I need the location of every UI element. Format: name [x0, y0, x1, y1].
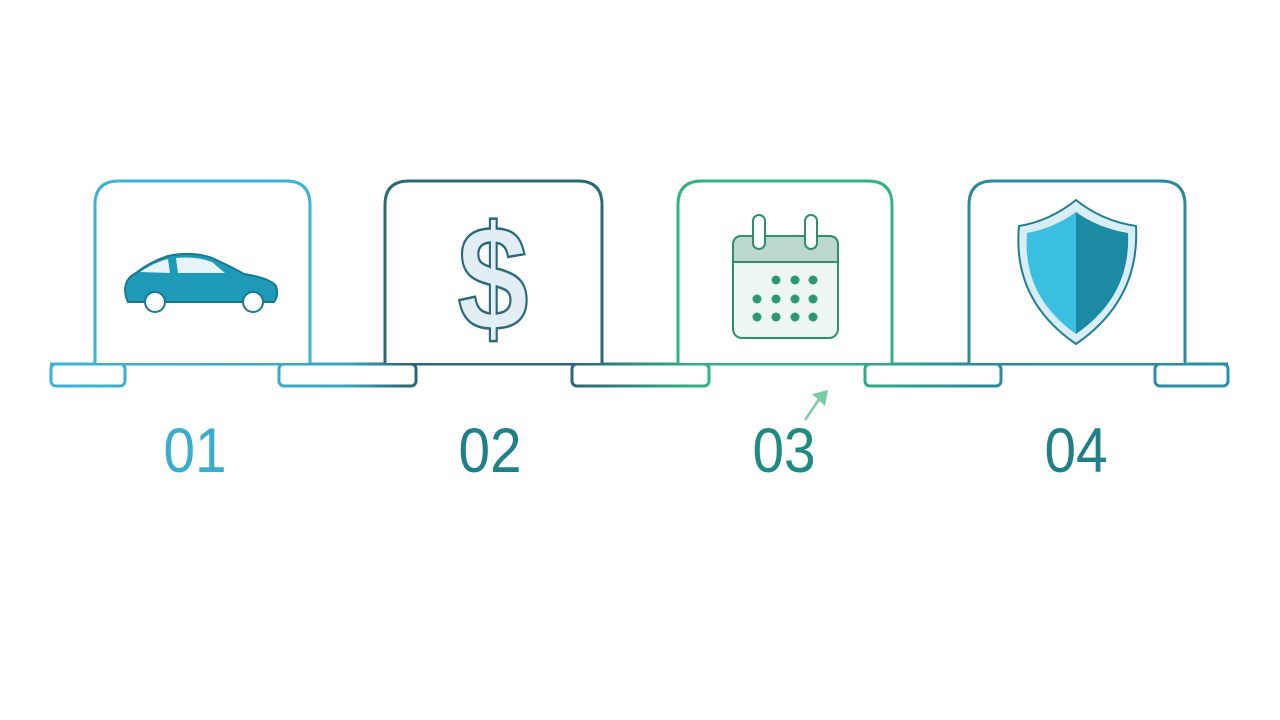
panel 4: shield [969, 181, 1185, 363]
number 02: 02 [458, 415, 522, 486]
panel 3: calendar [678, 181, 892, 363]
icon: car [125, 254, 277, 312]
number 04: 04 [1044, 415, 1108, 486]
number 01: 01 [163, 415, 227, 486]
icon: dollar sign: $ [458, 195, 528, 362]
baseline track with tabs [50, 364, 1228, 386]
number 03: 03 [752, 415, 816, 486]
arrow: small pointer [805, 390, 828, 420]
icon: calendar [733, 215, 838, 338]
panel 1: car [95, 181, 310, 363]
icon: shield [1018, 200, 1136, 344]
panel 2: dollar [385, 181, 602, 363]
